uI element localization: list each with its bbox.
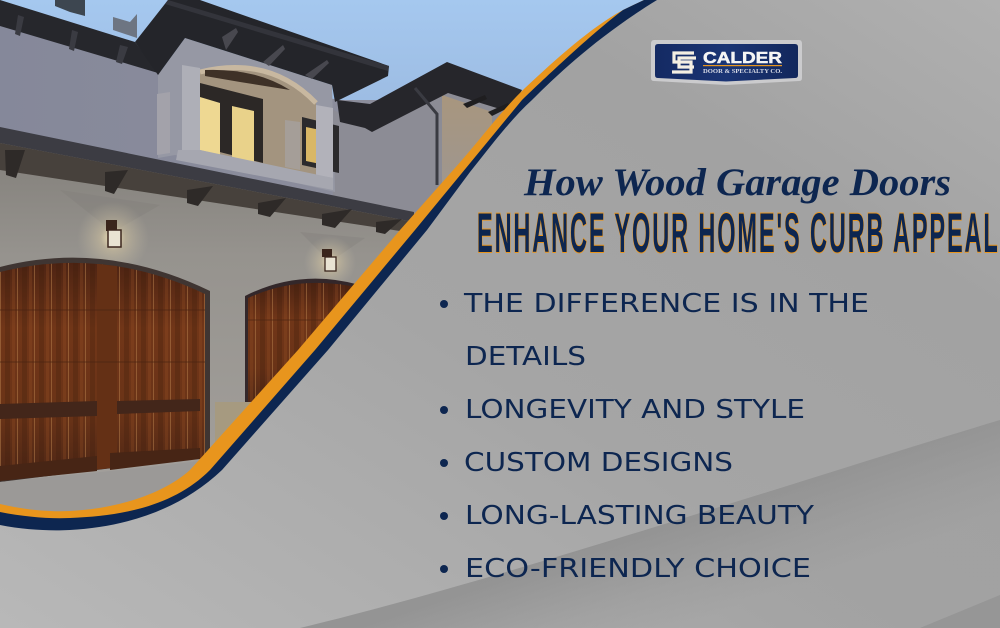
- title line 2: ENHANCE YOUR HOME'S CURB APPEAL: [477, 202, 998, 265]
- small garage door: [245, 279, 360, 405]
- upper walls: [0, 25, 520, 240]
- large garage door: [0, 250, 210, 482]
- pillars: [182, 65, 200, 152]
- item 1: DETAILS: [465, 342, 586, 372]
- lower roof band: [0, 127, 414, 234]
- roof flashing: [113, 14, 137, 38]
- downpipe: [415, 88, 437, 185]
- lantern left: [106, 220, 121, 247]
- arch ceiling: [205, 70, 290, 90]
- lantern shadow wedges: [60, 190, 160, 232]
- item 5: ECO-FRIENDLY CHOICE: [465, 554, 811, 584]
- logo wordmark: CALDER: [703, 50, 783, 67]
- dormer roof: [135, 0, 389, 102]
- item 3: CUSTOM DESIGNS: [464, 448, 733, 478]
- logo mark: [672, 53, 696, 72]
- tree: [55, 0, 85, 16]
- house photo: [0, 0, 644, 511]
- stone base: [215, 402, 252, 445]
- item 4: LONG-LASTING BEAUTY: [465, 501, 814, 531]
- ledge: [176, 150, 333, 190]
- title line 1: How Wood Garage Doors: [523, 161, 951, 204]
- lantern right: [322, 249, 336, 271]
- bullet list: [440, 289, 869, 584]
- driveway: [0, 445, 260, 530]
- lower wall: [0, 143, 420, 520]
- logo: [651, 40, 802, 85]
- logo badge: [651, 40, 802, 85]
- right wing roof: [337, 62, 522, 132]
- lantern glow left: [77, 202, 149, 274]
- lantern glow right: [304, 236, 356, 288]
- sky: [0, 0, 700, 300]
- item 1: THE DIFFERENCE IS IN THE: [463, 289, 869, 319]
- arch opening: [200, 68, 316, 175]
- side window: [302, 117, 339, 173]
- window: [200, 83, 263, 163]
- dormer wall: [158, 38, 335, 192]
- item 2: LONGEVITY AND STYLE: [465, 395, 805, 425]
- left roof: [0, 0, 158, 73]
- right wing wall: [333, 85, 515, 235]
- item 1: [440, 289, 869, 372]
- logo tagline: DOOR & SPECIALTY CO.: [703, 68, 782, 75]
